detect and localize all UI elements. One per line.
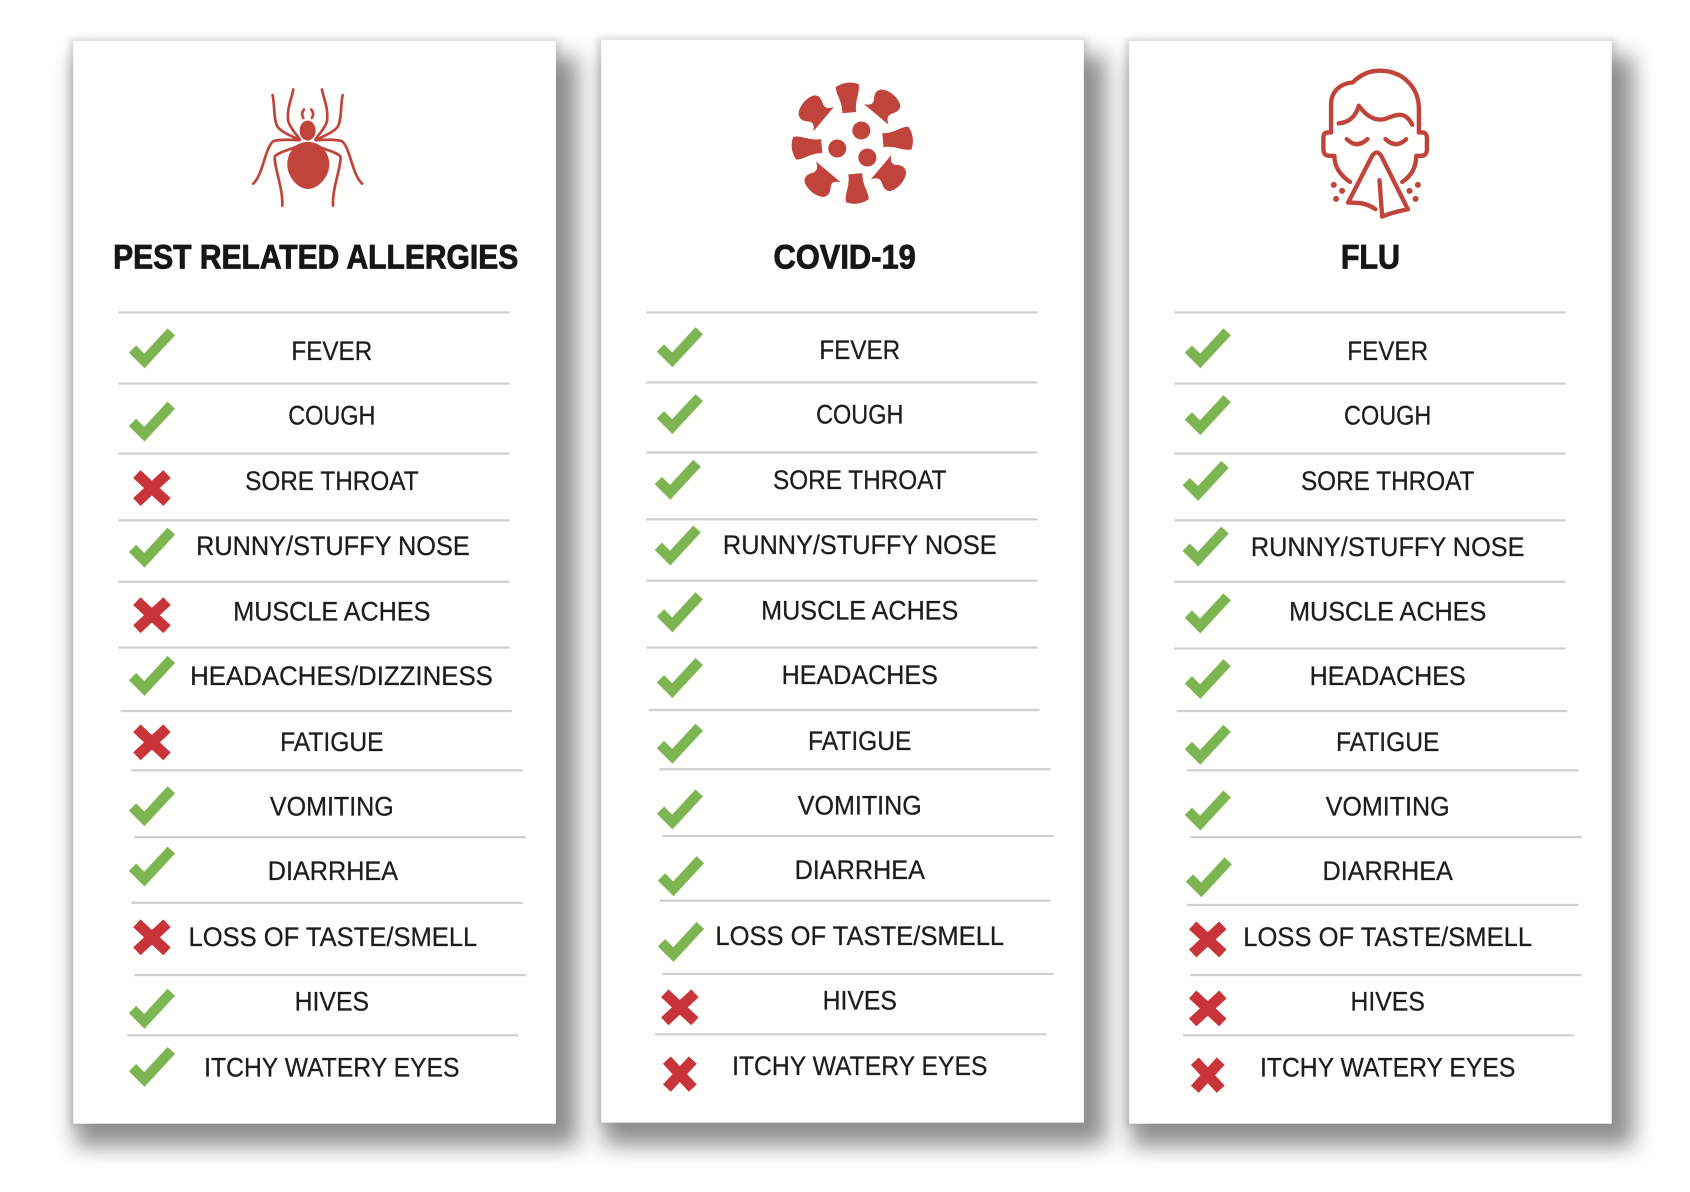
row: itchy watery eyes: ITCHY WATERY EYES [204, 1052, 460, 1082]
row: hives [665, 985, 897, 1021]
title: PEST RELATED ALLERGIES [113, 238, 518, 276]
row: sore throat: SORE THROAT [773, 465, 946, 495]
row: muscle aches: MUSCLE ACHES [761, 595, 958, 625]
title: COVID-19 [774, 238, 916, 276]
row: fatigue [660, 726, 911, 756]
row: sore throat [1186, 464, 1474, 496]
title: FLU [1341, 238, 1400, 276]
row: vomiting [660, 790, 922, 822]
row: headaches [1188, 661, 1466, 692]
row: vomiting: VOMITING [1326, 792, 1450, 822]
row: cough: COUGH [1344, 400, 1431, 430]
row: fatigue: FATIGUE [808, 726, 911, 756]
row: itchy watery eyes [133, 1050, 460, 1082]
row: sore throat: SORE THROAT [245, 466, 419, 496]
row: fever [660, 331, 900, 365]
row: runny nose: RUNNY/STUFFY NOSE [723, 530, 997, 560]
row: itchy watery eyes [1195, 1052, 1515, 1089]
row: muscle aches: MUSCLE ACHES [1289, 597, 1486, 627]
row: fatigue [137, 727, 384, 757]
row: loss of taste/smell: LOSS OF TASTE/SMELL [1243, 922, 1532, 952]
panel: flu [1125, 39, 1633, 1146]
row: diarrhea [1189, 856, 1453, 890]
row: fatigue: FATIGUE [280, 727, 384, 757]
row: cough: COUGH [288, 400, 375, 430]
row: diarrhea [133, 850, 398, 886]
row: runny nose: RUNNY/STUFFY NOSE [1251, 532, 1525, 562]
row: fatigue [1188, 727, 1439, 757]
row: cough [660, 398, 903, 429]
row: muscle aches [1188, 597, 1486, 627]
row: diarrhea [662, 855, 925, 889]
row: runny nose: RUNNY/STUFFY NOSE [196, 531, 470, 561]
row: fever: FEVER [291, 336, 372, 366]
row: vomiting: VOMITING [270, 792, 394, 822]
icon: spider [253, 89, 362, 206]
row: fever: FEVER [1347, 336, 1428, 366]
row: itchy watery eyes: ITCHY WATERY EYES [732, 1051, 987, 1081]
row: fever [133, 332, 372, 366]
icon: virus [791, 82, 914, 205]
row: headaches/dizziness: HEADACHES/DIZZINESS [190, 661, 493, 691]
row: itchy watery eyes [667, 1051, 987, 1088]
row: sore throat: SORE THROAT [1301, 466, 1474, 496]
row: headaches: HEADACHES [1310, 661, 1466, 691]
row: hives [1193, 987, 1425, 1022]
row: hives: HIVES [1351, 987, 1425, 1017]
row: cough [1188, 399, 1431, 430]
row: muscle aches [137, 597, 430, 629]
row: headaches: HEADACHES [782, 660, 938, 690]
row: muscle aches: MUSCLE ACHES [233, 597, 430, 627]
panel: covid-19 [597, 38, 1105, 1145]
row: hives [133, 987, 369, 1021]
row: fatigue: FATIGUE [1336, 727, 1439, 757]
row: cough: COUGH [816, 399, 903, 429]
icon: sneezing face [1323, 71, 1427, 217]
row: sore throat [658, 463, 946, 495]
row: hives: HIVES [823, 985, 897, 1015]
row: vomiting [1188, 792, 1450, 823]
row: loss of taste/smell: LOSS OF TASTE/SMELL [189, 922, 477, 952]
panel: pest related allergies [69, 39, 577, 1146]
row: diarrhea: DIARRHEA [268, 856, 398, 886]
row: muscle aches [660, 595, 958, 625]
row: diarrhea: DIARRHEA [795, 855, 925, 885]
row: loss of taste/smell: LOSS OF TASTE/SMELL [715, 921, 1004, 951]
row: vomiting: VOMITING [798, 790, 922, 820]
row: fever: FEVER [819, 335, 900, 365]
row: hives: HIVES [295, 987, 369, 1017]
row: sore throat [137, 466, 419, 502]
row: fever [1188, 332, 1428, 366]
row: headaches [660, 660, 938, 691]
row: itchy watery eyes: ITCHY WATERY EYES [1260, 1052, 1515, 1082]
row: cough [133, 400, 375, 434]
row: diarrhea: DIARRHEA [1323, 856, 1453, 886]
row: vomiting [133, 790, 394, 822]
